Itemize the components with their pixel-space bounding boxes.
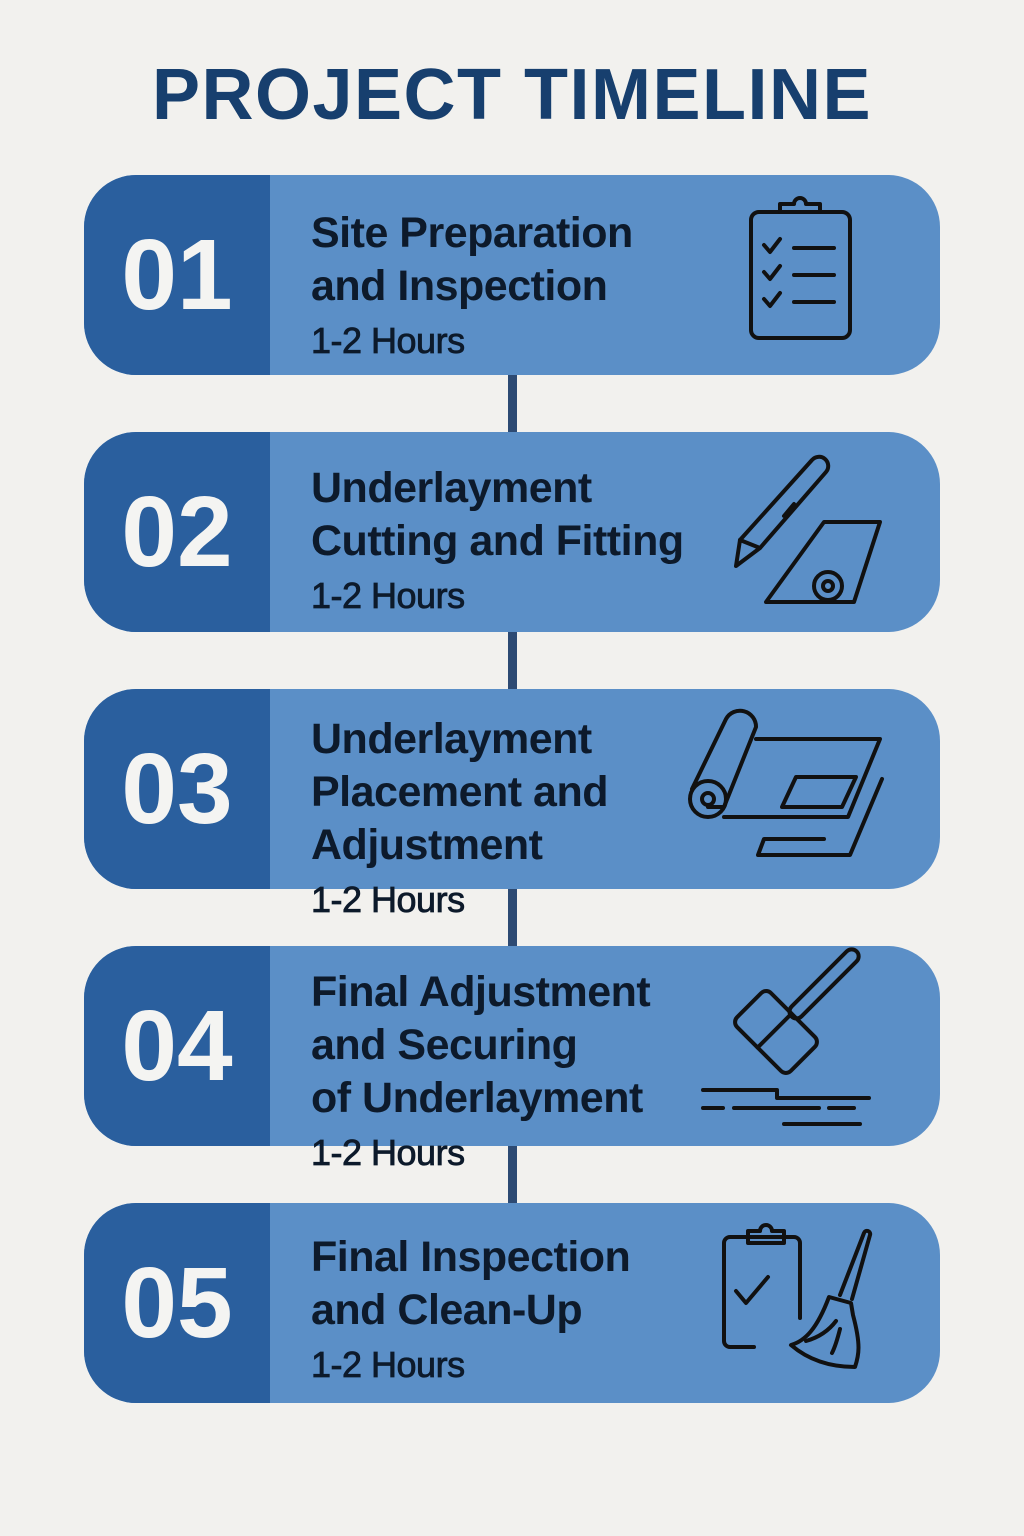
text: step 4: of Underlayment (311, 1074, 643, 1122)
text: step 1: Site Preparation (311, 209, 633, 257)
icon: checklist clipboard (749, 196, 852, 340)
icon: utility knife and roll (734, 454, 882, 604)
number 04: 04 (121, 990, 233, 1102)
icon: clipboard and broom (722, 1223, 872, 1369)
icon: underlayment roll (688, 708, 884, 857)
step 3 card (84, 689, 940, 889)
step 2 card (84, 432, 940, 632)
text: step 3: Underlayment (311, 715, 592, 763)
text: step 5: and Clean-Up (311, 1286, 582, 1334)
number 05: 05 (121, 1247, 233, 1359)
number 01 (84, 175, 270, 375)
text: step 4 (311, 968, 650, 1173)
text: step 4: Final Adjustment (311, 968, 650, 1016)
number 01: 01 (121, 219, 233, 331)
text: step 1 (311, 209, 633, 361)
number 03 (84, 689, 270, 889)
number 02: 02 (121, 476, 233, 588)
text: step 1: 1-2 Hours (311, 320, 465, 361)
text: step 3 (311, 715, 608, 920)
text: step 5: 1-2 Hours (311, 1344, 465, 1385)
icon: mallet on floor (701, 947, 871, 1126)
connector line (508, 370, 517, 1210)
text: step 2: 1-2 Hours (311, 575, 465, 616)
text: step 2: Underlayment (311, 464, 592, 512)
number 03: 03 (121, 733, 233, 845)
number 05 (84, 1203, 270, 1403)
step 4 card (84, 946, 940, 1146)
step 5 card (84, 1203, 940, 1403)
text: step 2: Cutting and Fitting (311, 517, 684, 565)
number 04 (84, 946, 270, 1146)
step 1 card (84, 175, 940, 375)
text: step 5 (311, 1233, 630, 1385)
number 02 (84, 432, 270, 632)
text: step 5: Final Inspection (311, 1233, 630, 1281)
title: PROJECT TIMELINE (152, 55, 872, 135)
text: step 3: 1-2 Hours (311, 879, 465, 920)
text: step 2 (311, 464, 684, 616)
text: step 4: and Securing (311, 1021, 577, 1069)
text: step 4: 1-2 Hours (311, 1132, 465, 1173)
text: step 3: Placement and (311, 768, 608, 816)
text: step 3: Adjustment (311, 821, 542, 869)
text: step 1: and Inspection (311, 262, 607, 310)
